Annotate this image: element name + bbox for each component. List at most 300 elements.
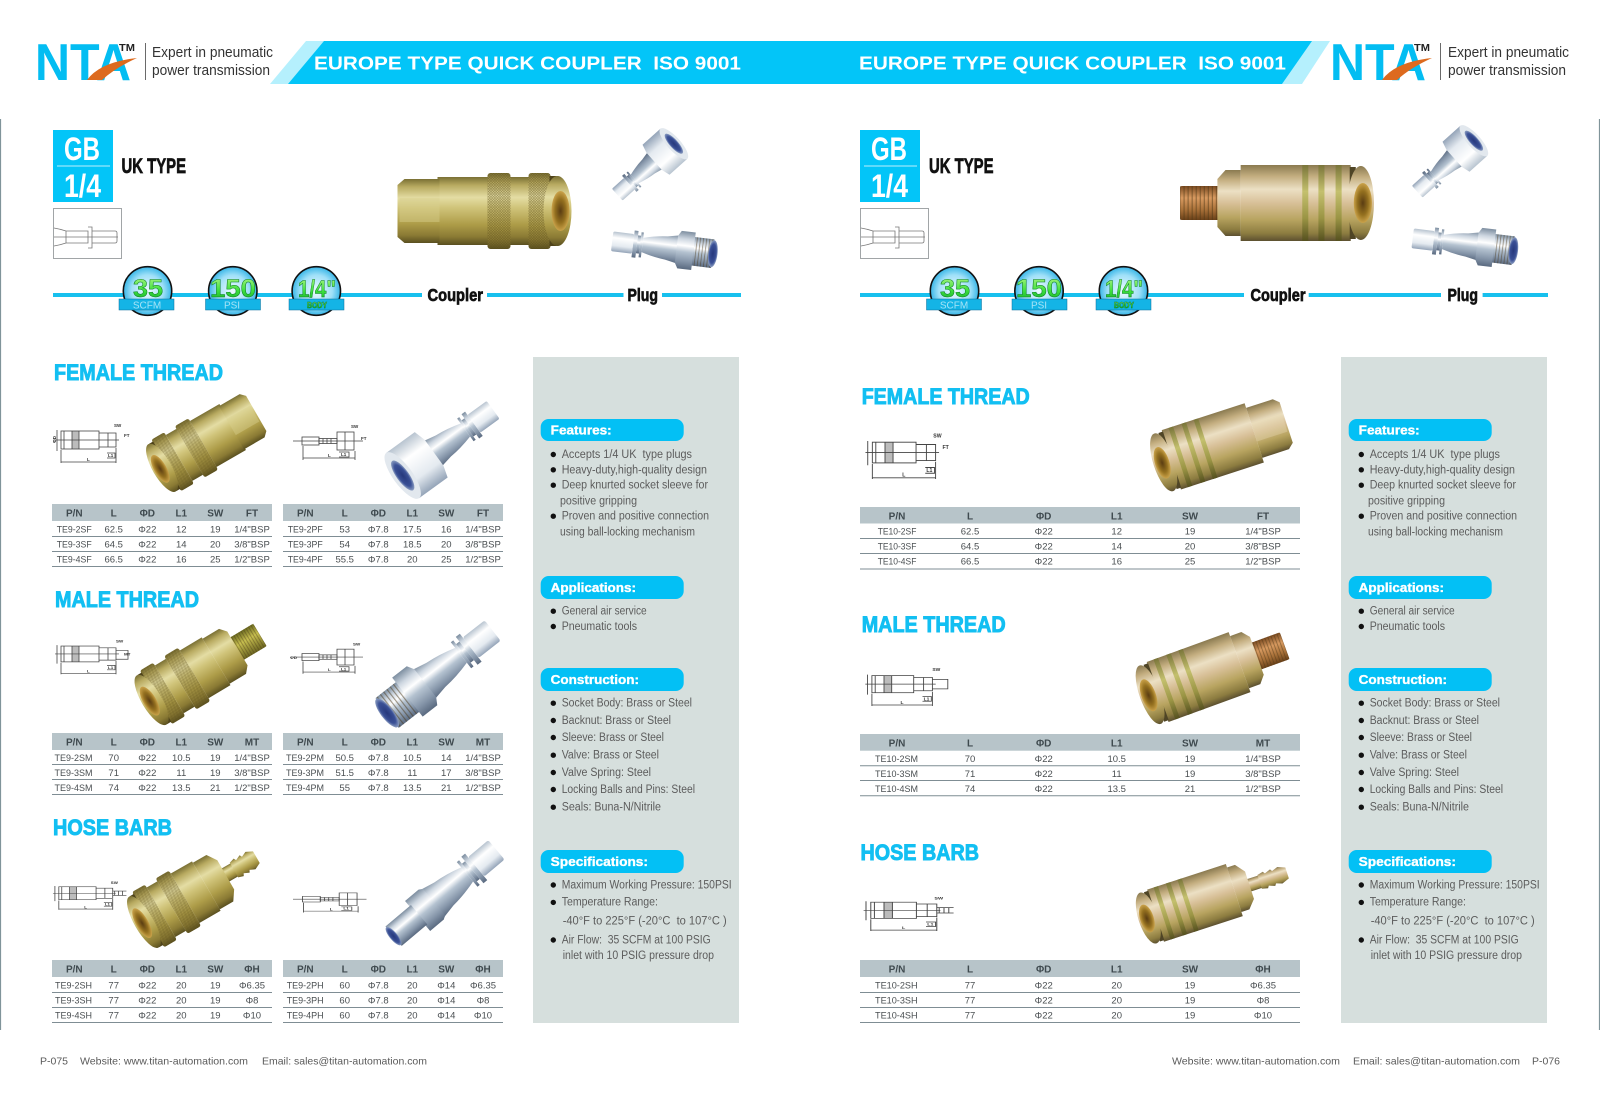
table: plug specs: MT — [476, 738, 490, 748]
logo right: Expert in pneumatic — [1448, 45, 1569, 61]
table: coupler specs: TE10-3SH — [875, 996, 918, 1007]
photo: plug — [367, 611, 508, 736]
table: plug specs: P/N — [297, 738, 314, 748]
table: coupler specs: P/N — [889, 964, 905, 976]
table: coupler specs: SW — [207, 738, 224, 748]
badge 1/4 body: 1/4" — [1105, 276, 1143, 303]
specifications: inlet with 10 PSIG pressure drop — [1371, 950, 1522, 962]
table: coupler specs: TE9-4SF — [57, 554, 92, 565]
table: coupler specs: Φ22 — [138, 524, 156, 535]
label plug: Plug — [1448, 285, 1478, 305]
heading: HOSE BARB — [53, 815, 172, 840]
drawing: plug: L — [328, 667, 331, 672]
specifications: Maximum Working Pressure: 150PSI — [562, 879, 732, 891]
table: plug specs: Φ6.35 — [470, 981, 496, 992]
table: coupler specs: Φ10 — [243, 1011, 261, 1022]
table: coupler specs: ΦD — [1036, 964, 1051, 976]
photo: plug — [378, 387, 510, 504]
features: Accepts 1/4 UK type plugs — [562, 449, 692, 461]
table: coupler specs: 1/2"BSP — [234, 554, 270, 565]
table: plug specs: 20 — [407, 554, 418, 565]
logo right — [1330, 34, 1569, 92]
table: coupler specs: SW — [1182, 964, 1199, 976]
drawing: coupler: SW — [111, 881, 118, 885]
table: plug specs: L1 — [406, 964, 419, 976]
table: coupler specs: TE9-2SM — [54, 753, 93, 764]
logo right: power transmission — [1448, 63, 1566, 79]
construction: Valve: Brass or Steel — [1370, 750, 1467, 762]
table: coupler specs: 70 — [108, 753, 119, 764]
table: coupler specs: 64.5 — [961, 542, 979, 553]
table: plug specs: 1/2"BSP — [465, 783, 501, 794]
specifications — [541, 850, 732, 962]
table: coupler specs: TE9-2SF — [57, 524, 92, 535]
drawing: coupler: SW — [114, 423, 122, 428]
specifications: Temperature Range: — [1370, 897, 1466, 909]
size tag GB 1/4: 1/4 — [871, 168, 908, 204]
photo: plug male — [610, 223, 720, 273]
table: plug specs: Φ10 — [474, 1011, 492, 1022]
table: plug specs: 16 — [441, 524, 452, 535]
table: coupler specs: 62.5 — [104, 524, 123, 535]
table: plug specs: Φ7.8 — [368, 554, 389, 565]
applications: General air service — [1370, 606, 1455, 618]
table: coupler specs: Φ10 — [1254, 1011, 1272, 1022]
table: coupler specs: 20 — [176, 981, 187, 992]
table: coupler specs: TE10-2SH — [875, 981, 918, 992]
construction: Valve Spring: Steel — [562, 767, 651, 779]
table: plug specs: TE9-3PF — [288, 539, 323, 550]
table: plug specs: P/N — [297, 964, 314, 976]
footer right: P-076 — [1532, 1056, 1560, 1068]
construction: Construction: — [551, 673, 639, 687]
table: plug specs: TE9-2PM — [286, 753, 324, 764]
table: plug specs: Φ14 — [437, 1011, 455, 1022]
drawing: coupler: L1 — [108, 665, 114, 670]
table: plug specs — [283, 960, 503, 1022]
heading: MALE THREAD — [55, 587, 199, 612]
label plug: Plug — [628, 285, 658, 305]
section: male thread, page 075 — [52, 587, 508, 794]
table: coupler specs: SW — [207, 964, 224, 976]
construction: Sleeve: Brass or Steel — [562, 732, 664, 744]
table: plug specs: 1/4"BSP — [465, 753, 501, 764]
specifications: Air Flow: 35 SCFM at 100 PSIG — [562, 934, 711, 946]
features: Accepts 1/4 UK type plugs — [1370, 449, 1500, 461]
drawing: coupler: SW — [934, 896, 944, 901]
table: coupler specs: 20 — [1185, 542, 1195, 553]
photo: coupler — [120, 830, 272, 954]
table: coupler specs: 1/4"BSP — [1245, 754, 1281, 765]
table: plug specs: 11 — [407, 768, 417, 779]
table: coupler specs: 25 — [210, 554, 221, 565]
table: coupler specs: TE10-3SM — [875, 769, 918, 780]
specifications: inlet with 10 PSIG pressure drop — [563, 950, 714, 962]
table: plug specs: ΦD — [371, 508, 386, 520]
table: plug specs: 1/2"BSP — [465, 554, 501, 565]
table: coupler specs: Φ6.35 — [1250, 981, 1276, 992]
table: plug specs: Φ7.8 — [368, 981, 389, 992]
table: coupler specs: L — [111, 964, 117, 976]
table: coupler specs: 19 — [210, 981, 221, 992]
table: coupler specs: L1 — [175, 508, 188, 520]
rule — [860, 293, 1548, 297]
table: coupler specs: 20 — [210, 539, 221, 550]
table: plug specs: Φ8 — [477, 996, 489, 1007]
table: coupler specs: 1/2"BSP — [234, 783, 270, 794]
table: plug specs: TE9-4PM — [286, 783, 324, 794]
table: plug specs: 55.5 — [335, 554, 354, 565]
table: coupler specs: 20 — [1111, 981, 1122, 992]
badge 150 PSI — [1012, 267, 1067, 315]
table: coupler specs — [52, 504, 272, 566]
drawing: coupler — [55, 639, 131, 674]
drawing: plug: SW — [351, 424, 359, 429]
drawing: coupler: L — [902, 926, 905, 931]
specifications: Specifications: — [551, 855, 648, 869]
table: coupler specs: 70 — [965, 754, 975, 765]
table: coupler specs: 13.5 — [1107, 784, 1126, 795]
table: coupler specs: Φ22 — [1035, 769, 1053, 780]
table: coupler specs — [52, 960, 272, 1022]
table: coupler specs: 19 — [1185, 1011, 1195, 1022]
table: plug specs: Φ7.8 — [368, 768, 389, 779]
table: plug specs: ΦH — [475, 964, 491, 976]
table: coupler specs: L — [967, 512, 973, 522]
size tag GB 1/4: 1/4 — [64, 168, 101, 204]
type label: UK TYPE — [929, 155, 994, 178]
construction: Locking Balls and Pins: Steel — [562, 784, 695, 796]
badge 1/4 body — [289, 267, 344, 315]
table: coupler specs: MT — [1256, 738, 1270, 750]
table: coupler specs: 62.5 — [961, 527, 979, 538]
table: coupler specs: ΦD — [1036, 738, 1051, 750]
drawing: coupler: L1 — [105, 903, 111, 906]
table: plug specs: 1/4"BSP — [465, 524, 501, 535]
section: female thread, page 075 — [52, 360, 510, 566]
table: coupler specs: 77 — [108, 996, 119, 1007]
table: coupler specs: ΦH — [244, 964, 260, 976]
table: plug specs: 13.5 — [403, 783, 422, 794]
table: coupler specs: 20 — [176, 996, 187, 1007]
construction — [1349, 668, 1503, 814]
features: Proven and positive connection — [562, 511, 709, 523]
logo left: Expert in pneumatic — [152, 45, 273, 61]
table: coupler specs: Φ22 — [1035, 542, 1053, 553]
table: coupler specs: P/N — [66, 964, 83, 976]
table: coupler specs: 1/4"BSP — [234, 524, 270, 535]
table: coupler specs: 19 — [1185, 754, 1195, 765]
table: plug specs: L — [342, 508, 348, 520]
table: coupler specs: 20 — [176, 1011, 187, 1022]
table: coupler specs: ΦH — [1255, 964, 1271, 976]
photo: plug — [378, 835, 509, 954]
badge 1/4 body: BODY — [307, 301, 328, 310]
drawing: coupler: L — [87, 457, 90, 462]
table: coupler specs: L — [111, 738, 117, 748]
table: coupler specs: 16 — [176, 554, 187, 565]
photo: coupler — [1144, 393, 1296, 495]
size tag GB 1/4 — [53, 130, 113, 204]
specifications: Specifications: — [1359, 855, 1456, 869]
table: coupler specs: 77 — [965, 1011, 975, 1022]
drawing: plug: L — [328, 453, 331, 458]
table: plug specs: 20 — [407, 996, 418, 1007]
table: plug specs: FT — [477, 508, 489, 520]
table: coupler specs: 19 — [1185, 981, 1195, 992]
table: coupler specs: 14 — [176, 539, 187, 550]
applications: Pneumatic tools — [562, 621, 637, 633]
drawing: coupler — [865, 434, 950, 479]
table: coupler specs: Φ22 — [1035, 981, 1053, 992]
table: coupler specs: Φ22 — [1035, 754, 1053, 765]
drawing: plug: ΦD — [290, 655, 297, 660]
features: Features: — [551, 424, 612, 438]
badge 1/4 body: 1/4" — [298, 276, 336, 303]
heading: MALE THREAD — [862, 612, 1006, 637]
heading: FEMALE THREAD — [54, 360, 223, 385]
table: coupler specs: L — [111, 508, 117, 520]
features: using ball-locking mechanism — [560, 526, 695, 538]
table: coupler specs: P/N — [889, 738, 905, 750]
table: coupler specs: 20 — [1111, 996, 1122, 1007]
table: plug specs: Φ7.8 — [368, 753, 389, 764]
table: coupler specs: SW — [1182, 738, 1199, 750]
table: coupler specs: Φ8 — [246, 996, 258, 1007]
table: plug specs: Φ7.8 — [368, 996, 389, 1007]
badge 35 SCFM: 35 — [940, 275, 970, 303]
table: plug specs: SW — [438, 964, 455, 976]
table: coupler specs: FT — [246, 508, 258, 520]
drawing: coupler: L1 — [926, 468, 933, 474]
table: coupler specs: 19 — [1185, 996, 1195, 1007]
construction: Sleeve: Brass or Steel — [1370, 732, 1472, 744]
drawing: coupler — [865, 667, 948, 706]
footer right: Website: www.titan-automation.com — [1172, 1056, 1340, 1068]
table: coupler specs: 1/2"BSP — [1245, 557, 1281, 568]
specifications: -40°F to 225°F (-20°C to 107°C ) — [1371, 916, 1535, 928]
table: plug specs: Φ7.8 — [368, 524, 389, 535]
table: coupler specs: ΦD — [140, 738, 155, 748]
photo: coupler — [1130, 847, 1296, 947]
section: hose barb, page 076 — [860, 840, 1300, 1022]
construction — [541, 668, 695, 814]
table: coupler specs: TE9-2SH — [55, 981, 92, 992]
table: plug specs: SW — [438, 738, 455, 748]
table: plug specs: Φ7.8 — [368, 539, 389, 550]
table: coupler specs: 74 — [108, 783, 119, 794]
label coupler: Coupler — [1250, 285, 1306, 305]
table: coupler specs: ΦD — [1036, 512, 1051, 522]
badge 35 SCFM: 35 — [133, 275, 163, 303]
table: coupler specs: 3/8"BSP — [1245, 542, 1281, 553]
table: coupler specs: Φ22 — [138, 981, 156, 992]
panel: product details, page 076 — [1341, 357, 1547, 1023]
drawing: coupler: L — [84, 906, 88, 909]
drawing: plug: L1 — [343, 907, 350, 910]
table: plug specs: SW — [438, 508, 455, 520]
table: plug specs: Φ14 — [437, 981, 455, 992]
table: plug specs: TE9-3PH — [287, 996, 324, 1007]
table: coupler specs: TE9-4SM — [54, 783, 93, 794]
construction: Backnut: Brass or Steel — [562, 715, 671, 727]
specifications: Temperature Range: — [562, 897, 658, 909]
features: Proven and positive connection — [1370, 511, 1517, 523]
construction: Valve Spring: Steel — [1370, 767, 1459, 779]
table: plug specs: 3/8"BSP — [465, 539, 501, 550]
badge 1/4 body — [1096, 267, 1151, 315]
table: coupler specs: Φ22 — [138, 753, 156, 764]
table: plug specs: L1 — [406, 508, 419, 520]
photo: plug female — [1404, 121, 1492, 207]
table: coupler specs: 16 — [1111, 557, 1122, 568]
type label: UK TYPE — [122, 155, 186, 178]
table: coupler specs: TE10-2SM — [875, 754, 918, 765]
table: coupler specs: 1/4"BSP — [1245, 527, 1281, 538]
table: coupler specs: L1 — [1111, 738, 1123, 750]
photo: plug male — [1410, 220, 1520, 270]
table: coupler specs: 3/8"BSP — [1245, 769, 1281, 780]
table: coupler specs: FT — [1257, 512, 1269, 522]
table: coupler specs — [860, 507, 1300, 569]
drawing: coupler: FT — [942, 445, 950, 451]
drawing: plug: FT — [361, 436, 367, 441]
drawing: plug: SW — [353, 642, 360, 647]
drawing: coupler: L — [901, 700, 904, 705]
drawing: coupler: L — [87, 669, 90, 673]
table: coupler specs: L1 — [175, 964, 188, 976]
drawing: plug — [293, 893, 366, 912]
table: coupler specs: 12 — [176, 524, 187, 535]
applications: Pneumatic tools — [1370, 621, 1445, 633]
drawing: coupler: L1 — [927, 922, 934, 927]
table: coupler specs: 12 — [1111, 527, 1122, 538]
table: coupler specs: 77 — [965, 981, 975, 992]
table: plug specs: 20 — [407, 981, 418, 992]
table: plug specs: TE9-2PF — [288, 524, 323, 535]
applications: Applications: — [1359, 581, 1444, 595]
table: plug specs: 10.5 — [403, 753, 422, 764]
table: plug specs: P/N — [297, 508, 314, 520]
drawing: coupler — [52, 423, 130, 463]
construction: Socket Body: Brass or Steel — [562, 698, 692, 710]
drawing: coupler: MT — [124, 652, 131, 657]
table: plug specs: TE9-4PF — [288, 554, 323, 565]
footer left: Website: www.titan-automation.com — [80, 1056, 248, 1068]
table: plug specs: ΦD — [371, 738, 386, 748]
table: coupler specs: 19 — [210, 1011, 221, 1022]
table: plug specs: L — [342, 738, 348, 748]
table: coupler specs: 1/4"BSP — [234, 753, 270, 764]
drawing: coupler: L1 — [924, 697, 930, 701]
section: male thread, page 076 — [860, 612, 1300, 796]
photo: coupler — [139, 388, 271, 498]
table: plug specs: 50.5 — [335, 753, 354, 764]
table: coupler specs: SW — [207, 508, 224, 520]
table: coupler specs: Φ22 — [138, 996, 156, 1007]
specifications: Air Flow: 35 SCFM at 100 PSIG — [1370, 934, 1519, 946]
drawing: coupler: SW — [932, 667, 941, 672]
header title right: EUROPE TYPE QUICK COUPLER ISO 9001 — [859, 52, 1286, 73]
table: coupler specs: 14 — [1111, 542, 1122, 553]
logo left: NTA — [35, 34, 131, 92]
page 076 hero — [860, 121, 1548, 315]
table: plug specs — [283, 733, 503, 794]
construction: Seals: Buna-N/Nitrile — [562, 802, 661, 814]
construction: Construction: — [1359, 673, 1447, 687]
drawing: plug: L — [330, 907, 333, 911]
drawing: coupler: SW — [116, 639, 123, 643]
table: coupler specs — [860, 734, 1300, 796]
size tag GB 1/4: GB — [871, 131, 907, 167]
table: coupler specs: 11 — [1112, 769, 1122, 780]
table: coupler specs: 11 — [176, 768, 186, 779]
specifications: -40°F to 225°F (-20°C to 107°C ) — [563, 916, 727, 928]
table: coupler specs: L1 — [175, 738, 188, 748]
table: coupler specs: 77 — [108, 981, 119, 992]
drawing: coupler: FT — [124, 433, 130, 438]
table: coupler specs: MT — [245, 738, 259, 748]
badge 150 PSI: 150 — [1016, 275, 1062, 303]
table: coupler specs: 25 — [1185, 557, 1195, 568]
table: coupler specs: Φ22 — [1035, 784, 1053, 795]
table: plug specs: TE9-3PM — [286, 768, 324, 779]
construction: Seals: Buna-N/Nitrile — [1370, 802, 1469, 814]
table: plug specs: TE9-4PH — [287, 1011, 324, 1022]
table: coupler specs: TE10-2SF — [878, 527, 917, 538]
table: coupler specs: TE9-3SM — [54, 768, 93, 779]
table: coupler specs: Φ22 — [1035, 996, 1053, 1007]
size tag GB 1/4: GB — [64, 131, 100, 167]
table: plug specs: 60 — [339, 996, 350, 1007]
photo: plug female — [604, 124, 692, 210]
rule — [53, 293, 741, 297]
table: coupler specs: 74 — [965, 784, 975, 795]
features: using ball-locking mechanism — [1368, 526, 1503, 538]
table: plug specs: 3/8"BSP — [465, 768, 501, 779]
features: positive gripping — [1368, 496, 1445, 508]
table: plug specs: Φ14 — [437, 996, 455, 1007]
plug profile drawing — [860, 208, 928, 258]
table: coupler specs: TE9-3SF — [57, 539, 92, 550]
table: coupler specs: Φ22 — [1035, 1011, 1053, 1022]
table: coupler specs: 21 — [210, 783, 221, 794]
table: coupler specs: SW — [1182, 512, 1199, 522]
drawing: coupler — [864, 896, 954, 931]
plug profile drawing — [54, 208, 122, 258]
applications: General air service — [562, 606, 647, 618]
label coupler: Coupler — [428, 285, 483, 305]
photo: coupler — [1129, 616, 1296, 728]
table: coupler specs: 1/2"BSP — [1245, 784, 1281, 795]
table: plug specs: TE9-2PH — [287, 981, 324, 992]
table: coupler specs: 21 — [1185, 784, 1195, 795]
table: coupler specs: Φ22 — [138, 768, 156, 779]
panel: product details, page 075 — [533, 357, 739, 1023]
drawing: plug — [293, 424, 367, 460]
section: female thread, page 076 — [860, 384, 1300, 569]
table: coupler specs: 19 — [210, 753, 221, 764]
specifications — [1349, 850, 1540, 962]
table: plug specs: 54 — [339, 539, 350, 550]
table: coupler specs: 19 — [210, 996, 221, 1007]
table: coupler specs: 19 — [210, 524, 221, 535]
table: coupler specs: L1 — [1111, 512, 1123, 522]
table: coupler specs: TE10-4SF — [878, 557, 917, 568]
construction: Socket Body: Brass or Steel — [1370, 698, 1500, 710]
table: plug specs: 53 — [339, 524, 350, 535]
features — [1349, 419, 1517, 538]
